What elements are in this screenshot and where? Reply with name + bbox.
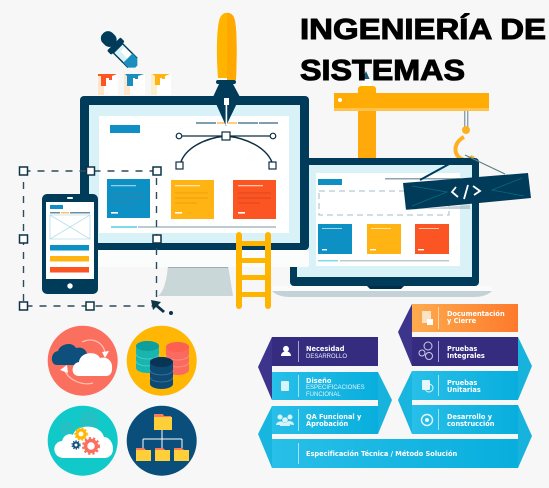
step: Diseño bbox=[272, 372, 392, 434]
icon: databases circle bbox=[127, 326, 197, 396]
step: Especificación bbox=[272, 439, 518, 468]
step: Necesidad: Necesidad bbox=[306, 345, 345, 353]
icon: dropper bbox=[96, 27, 143, 73]
step: Pruebas Unitarias: Pruebas bbox=[447, 379, 477, 387]
step: Necesidad: DESARROLLO bbox=[306, 354, 347, 360]
phone bbox=[42, 194, 98, 294]
step: Desarrollo: construcción bbox=[447, 420, 495, 428]
step: Desarrollo: Desarrollo y bbox=[447, 413, 493, 421]
step: Pruebas Unitarias: Unitarias bbox=[447, 386, 481, 394]
icon: paint pots bbox=[98, 74, 171, 95]
step: Especificación: Especificación Técnica / Método Solución bbox=[306, 450, 457, 458]
step: QA Funcional: Aprobación bbox=[306, 420, 348, 428]
sign: code tag bbox=[403, 155, 531, 210]
laptop bbox=[272, 158, 492, 297]
step: Pruebas Integrales: Pruebas bbox=[447, 345, 477, 353]
selection frame with handles bbox=[20, 167, 161, 310]
step: QA Funcional: QA Funcional y bbox=[306, 413, 362, 421]
step: Documentación: y Cierre bbox=[447, 317, 477, 325]
step: Diseño: FUNCIONAL bbox=[306, 392, 341, 398]
icon: cloud gears circle bbox=[48, 406, 118, 476]
step: Documentación bbox=[398, 304, 518, 366]
step: Pruebas Unitarias bbox=[398, 371, 518, 434]
step: Pruebas Integrales bbox=[412, 337, 532, 400]
step: Documentación: Documentación bbox=[447, 310, 505, 318]
step: Pruebas Integrales: Integrales bbox=[447, 352, 485, 360]
step: QA Funcional bbox=[258, 406, 378, 468]
panel: left process column bbox=[258, 337, 518, 468]
title: SISTEMAS bbox=[300, 55, 465, 87]
step: Diseño: ESPECIFICACIONES bbox=[306, 385, 365, 391]
ladder bbox=[236, 232, 271, 309]
title bbox=[300, 14, 546, 87]
icon: fountain pen bbox=[213, 13, 240, 126]
step: Diseño: Diseño bbox=[306, 377, 332, 385]
title: INGENIERÍA DE bbox=[300, 14, 546, 46]
step: Necesidad bbox=[258, 337, 378, 400]
bezier curve tool bbox=[176, 132, 276, 169]
crane bbox=[334, 71, 489, 160]
panel: right process column bbox=[398, 304, 532, 468]
monitor bbox=[80, 96, 309, 296]
icon: cloud sync circle bbox=[48, 326, 118, 396]
icon: folder tree circle bbox=[127, 406, 197, 476]
step: Desarrollo bbox=[412, 405, 532, 468]
icon: cursor arrow bbox=[151, 300, 173, 315]
